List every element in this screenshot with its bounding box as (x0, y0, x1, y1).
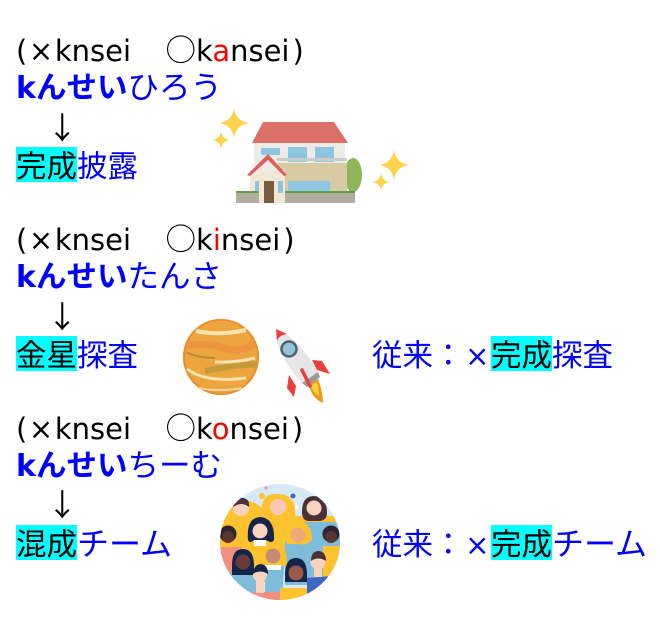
romaji note: konsei: × (29, 412, 53, 446)
typo line: kんせいたんさ: kんせいたんさ (16, 251, 222, 297)
icon: Venus planet (183, 319, 259, 395)
romaji note: kansei: × (29, 34, 53, 68)
note: previous wording: 従来： 探査 (372, 331, 613, 375)
corrected: 完成披露: 披露 (77, 142, 138, 186)
note: previous wording: 従来： チーム (372, 519, 647, 565)
arrow: ↓ (47, 481, 78, 525)
icon: diverse group of people (220, 484, 340, 600)
corrected: 完成披露: 完成 (16, 142, 77, 186)
note: previous wording: × (465, 339, 489, 373)
arrow: ↓ (47, 104, 78, 148)
icon: rocket (276, 329, 330, 403)
typo line: kんせいひろう: kんせいひろう (16, 62, 222, 108)
corrected: 混成チーム: チーム (77, 519, 172, 565)
romaji note: konsei: ( knsei konsei) (16, 412, 303, 446)
corrected: 完成披露 (16, 142, 138, 186)
note: previous wording: 完成 (491, 331, 552, 375)
romaji note: konsei: ○ (166, 404, 196, 448)
corrected: 金星探査 (16, 331, 138, 375)
corrected: 金星探査: 金星 (16, 331, 77, 375)
romaji note: kinsei: ○ (166, 215, 196, 259)
note: previous wording: 完成 (491, 520, 552, 564)
panel: kinsei example (16, 215, 613, 375)
corrected: 混成チーム: 混成 (16, 520, 77, 564)
romaji note: kinsei: ( knsei kinsei) (16, 223, 295, 257)
romaji note: kinsei: × (29, 223, 53, 257)
note: previous wording: × (465, 528, 489, 562)
corrected: 金星探査: 探査 (77, 331, 138, 375)
typo line: kんせいちーむ: kんせいちーむ (16, 440, 222, 486)
panel: kansei example (16, 26, 304, 186)
corrected: 混成チーム (16, 519, 172, 565)
arrow: ↓ (47, 293, 78, 337)
romaji note: kansei: ○ (166, 26, 196, 70)
panel: konsei example (16, 404, 647, 565)
romaji note: kansei: ( knsei kansei) (16, 34, 304, 68)
icon: house with sparkles (212, 108, 409, 203)
